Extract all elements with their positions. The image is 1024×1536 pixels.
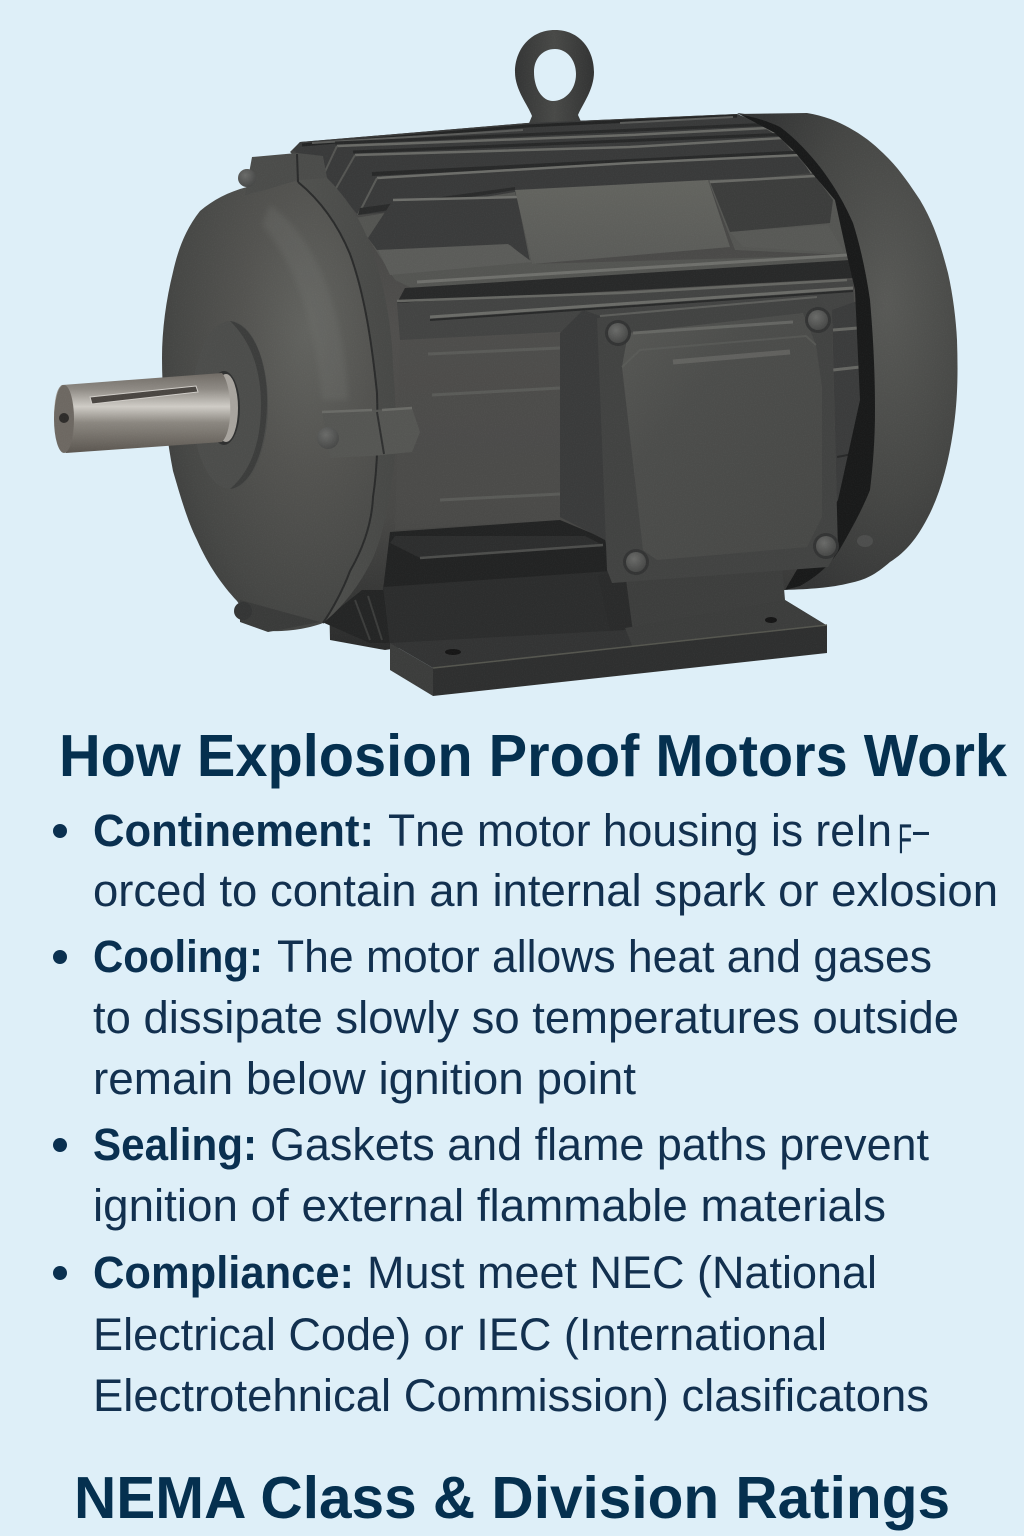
fan cover	[737, 113, 958, 590]
bullet: compliance: Compliance:	[93, 1247, 354, 1298]
bullet: compliance: Electrotehnical Commission) clasificatons	[93, 1370, 929, 1421]
foot front face	[433, 625, 827, 696]
bullet: continement: Tne motor housing is reIn	[388, 805, 892, 856]
cooling fins	[293, 114, 812, 215]
output shaft	[54, 373, 230, 453]
bullet: sealing: Gaskets and flame paths prevent	[270, 1119, 929, 1170]
fan cover screw	[857, 535, 873, 547]
bullet: sealing	[53, 1119, 929, 1231]
bullet: continement: orced to contain an internal spark or exlosion	[93, 865, 998, 916]
bullet: continement	[53, 804, 998, 916]
side lug and bolt	[322, 408, 420, 458]
bullet: cooling	[53, 931, 959, 1104]
bullet: continement: –	[913, 804, 929, 855]
shaft hub	[192, 321, 268, 489]
bullet: cooling: The motor allows heat and gases	[277, 931, 932, 982]
rear fins	[322, 590, 392, 643]
heading: NEMA ratings: NEMA Class & Division Ratings	[74, 1465, 950, 1531]
bullet: compliance: Electrical Code) or IEC (International	[93, 1309, 827, 1360]
bullet: cooling: to dissipate slowly so temperatures outside	[93, 992, 959, 1043]
right recess	[710, 176, 833, 232]
foot top plane	[390, 600, 826, 668]
bullet: continement: Continement:	[93, 805, 374, 856]
bullet: cooling: Cooling:	[93, 931, 263, 982]
terminal box	[560, 297, 839, 583]
eye bolt	[515, 30, 594, 128]
title: How Explosion Proof Motors Work	[59, 723, 1007, 789]
ledge	[417, 255, 847, 282]
foot mounting holes	[445, 617, 777, 655]
left recess	[368, 198, 530, 262]
bullet: sealing: ignition of external flammable materials	[93, 1180, 886, 1231]
side ribs	[397, 280, 855, 340]
bullet: continement: F	[898, 815, 912, 862]
bullet: compliance: Must meet NEC (National	[367, 1247, 877, 1298]
bullet: sealing: Sealing:	[93, 1119, 257, 1170]
nameplate pad	[515, 180, 730, 264]
bullet: compliance	[53, 1247, 929, 1421]
terminal box lid	[622, 313, 822, 560]
fan cover gap shadow	[737, 113, 890, 590]
lid bolts	[605, 307, 839, 575]
illustration: explosion proof electric motor	[54, 30, 958, 696]
top lug and bolt	[245, 153, 327, 195]
right side panel	[832, 300, 868, 548]
lower body below fins	[355, 192, 850, 292]
end bell dome	[162, 153, 420, 632]
lower shadow	[383, 520, 625, 590]
bottom bolt	[240, 600, 320, 632]
bullet: cooling: remain below ignition point	[93, 1053, 636, 1104]
bullet list	[53, 804, 998, 1421]
keyway	[90, 386, 198, 404]
motor body with cooling fins	[290, 114, 878, 650]
mounting foot	[383, 565, 827, 696]
